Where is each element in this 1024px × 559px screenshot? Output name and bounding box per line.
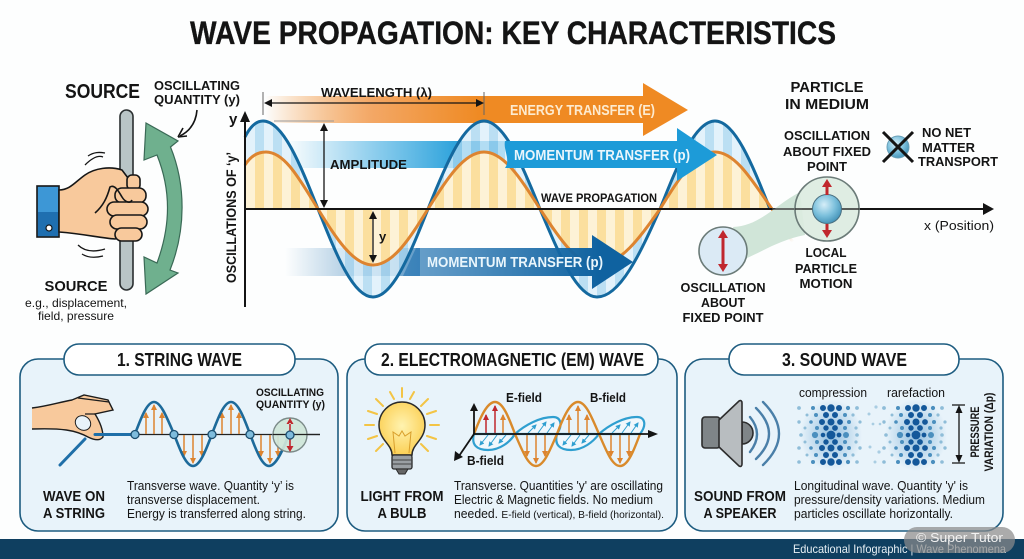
label: oscillating quantity: OSCILLATING [154, 78, 240, 93]
panel box [347, 359, 677, 531]
description: pressure/density variations. Medium [794, 493, 985, 507]
E-field wave [474, 402, 640, 466]
string rope [60, 434, 135, 465]
x axis [245, 203, 994, 215]
wave line: orange fading tail [772, 209, 793, 242]
label: wave on a string: A STRING [43, 505, 105, 522]
description [454, 479, 664, 521]
description: Energy is transferred along string. [127, 507, 306, 521]
title pill [365, 344, 658, 375]
y displacement marker: y [379, 229, 387, 244]
large circle with particle [795, 177, 859, 241]
labels: compression and rarefaction [799, 386, 945, 400]
label: local particle motion: MOTION [800, 276, 852, 291]
sound arcs [750, 402, 779, 465]
wave line: blue [245, 121, 770, 297]
arrow: momentum transfer lower, rear part [285, 248, 420, 276]
panel box [20, 359, 338, 531]
axis over funnel [772, 208, 795, 210]
label: oscillation about fixed point, lower: FIXED POINT [682, 310, 764, 325]
icon: hand gripping rod [37, 152, 148, 257]
description: Transverse wave. Quantity ‘y’ is [127, 479, 294, 493]
arrow: momentum transfer upper, front part [505, 128, 717, 181]
string wave curve [135, 402, 289, 466]
small circle with red arrow [699, 227, 747, 275]
chart: rarefaction cluster [882, 399, 947, 471]
heading: particle in medium: IN MEDIUM [785, 96, 869, 113]
heading: 1. STRING WAVE [117, 350, 242, 370]
description: Transverse. Quantities 'y' are oscillating [454, 479, 663, 493]
pressure variation marker [952, 392, 996, 472]
description [794, 479, 985, 521]
amplitude marker: AMPLITUDE [330, 157, 407, 172]
icon: light bulb [365, 388, 439, 474]
label: light from a bulb: LIGHT FROM [360, 488, 444, 505]
label: oscillating quantity [256, 387, 325, 411]
arrow: label to green arc [178, 110, 197, 137]
wave nodes [131, 430, 254, 438]
heading: 3. SOUND WAVE [782, 350, 907, 370]
source section: hand shaking a rod [25, 78, 240, 323]
description: Electric & Magnetic fields. No medium [454, 493, 653, 507]
label: x axis title: x (Position) [924, 218, 994, 233]
labels: field names: B-field [467, 454, 504, 468]
heading: 2. ELECTROMAGNETIC (EM) WAVE [381, 350, 644, 370]
B-field arrows [480, 422, 638, 446]
labels: field names: E-field [506, 391, 542, 405]
label: no net matter transport: NO NET [922, 125, 971, 140]
label: oscillation about fixed point, lower: ABOUT [701, 295, 745, 310]
main wave chart [224, 83, 994, 307]
string baseline [135, 434, 320, 436]
label: source details: SOURCE [44, 278, 108, 295]
label: oscillation about fixed point, lower: OSCILLATION [680, 280, 766, 295]
label: y axis title: OSCILLATIONS OF ‘y’ [224, 152, 239, 283]
description: Longitudinal wave. Quantity 'y' is [794, 479, 968, 493]
y axis [240, 111, 250, 307]
label: momentum transfer lower: MOMENTUM TRANSFER (p) [427, 255, 603, 271]
label: oscillating quantity [154, 78, 240, 107]
wave line: orange [245, 152, 772, 265]
label: light from a bulb: A BULB [378, 505, 427, 522]
description: transverse displacement. [127, 493, 260, 507]
labels: compression and rarefaction: compression [799, 386, 867, 400]
title pill [64, 344, 295, 375]
pressure variation marker: PRESSURE [968, 406, 982, 458]
rod [120, 110, 133, 290]
label: no net matter transport: MATTER [922, 140, 976, 155]
label: no net matter transport [918, 125, 998, 169]
description: needed. E-field (vertical), B-field (horizontal). [454, 507, 664, 521]
label: no net matter transport: TRANSPORT [918, 154, 998, 169]
wave fill: blue stripes [245, 121, 770, 297]
B-field lobes [473, 417, 644, 450]
label: source details: e.g., displacement, [25, 296, 127, 310]
label: local particle motion: LOCAL [806, 245, 847, 260]
label: sound from a speaker: SOUND FROM [694, 488, 786, 505]
label: y: y [229, 111, 238, 128]
arrow: momentum transfer lower, front part [403, 235, 633, 289]
pressure variation marker: VARIATION (Δp) [982, 392, 996, 472]
label: wave on a string [43, 488, 105, 522]
watermark: © Super Tutor [916, 530, 1004, 545]
label: source details [25, 278, 127, 323]
footer bar [0, 527, 1024, 559]
label: wave propagation: WAVE PROPAGATION [541, 191, 657, 205]
EM axes [454, 403, 658, 461]
arrow: momentum transfer upper, rear part [285, 141, 505, 168]
force arrows [146, 405, 278, 463]
wavelength marker: WAVELENGTH (λ) [321, 86, 432, 100]
icon: crossed-out particle [883, 132, 913, 162]
heading: particle in medium [785, 79, 869, 113]
label: oscillation about fixed point, lower [680, 280, 766, 325]
y displacement marker [369, 211, 387, 263]
title: WAVE PROPAGATION: KEY CHARACTERISTICS [190, 15, 836, 51]
heading: source: SOURCE [65, 81, 140, 103]
label: oscillating quantity: QUANTITY (y) [256, 399, 325, 411]
wave fill: yellow stripes [245, 152, 772, 265]
label: source details: field, pressure [38, 309, 114, 323]
icon: speaker [702, 401, 753, 466]
E-field arrows [486, 406, 629, 463]
panel: sound wave [685, 344, 1003, 531]
heading: particle in medium: PARTICLE [790, 79, 864, 96]
label: local particle motion [795, 245, 857, 291]
wavelength marker [263, 86, 484, 115]
description: particles oscillate horizontally. [794, 507, 953, 521]
label: oscillation about fixed point, upper: POINT [807, 159, 847, 174]
label: wave on a string: WAVE ON [43, 488, 105, 505]
amplitude marker [274, 121, 407, 208]
panel: string wave [20, 344, 338, 531]
label: momentum transfer upper: MOMENTUM TRANSFER (p) [514, 148, 690, 164]
labels: field names: B-field [590, 391, 626, 405]
label: oscillation about fixed point, upper [783, 128, 871, 174]
description [127, 479, 306, 521]
label: energy transfer: ENERGY TRANSFER (E) [510, 103, 655, 119]
connector funnel between circles [733, 192, 805, 259]
watermark [904, 527, 1015, 553]
label: sound from a speaker: A SPEAKER [704, 505, 777, 522]
label: light from a bulb [360, 488, 444, 522]
icon: green double arrow arc [144, 123, 182, 294]
label: sound from a speaker [694, 488, 786, 522]
label: oscillating quantity: OSCILLATING [256, 387, 324, 399]
label: local particle motion: PARTICLE [795, 261, 857, 276]
stray particles between clusters [868, 405, 881, 464]
labels: compression and rarefaction: rarefaction [887, 386, 945, 400]
label: oscillating quantity: QUANTITY (y) [154, 92, 240, 107]
particle in medium section [680, 79, 998, 325]
particle inset [273, 418, 320, 452]
footer text: Educational Infographic | Wave Phenomena [793, 542, 1006, 556]
arrow: energy transfer [265, 83, 688, 136]
chart: compression cluster [797, 399, 862, 471]
title pill [729, 344, 959, 375]
icon: hand plucking string [32, 395, 113, 440]
label: oscillation about fixed point, upper: OSCILLATION [784, 128, 870, 143]
labels: field names [467, 391, 626, 468]
panel: electromagnetic wave [347, 344, 677, 531]
panel box [685, 359, 1003, 531]
label: oscillation about fixed point, upper: ABOUT FIXED [783, 144, 871, 159]
